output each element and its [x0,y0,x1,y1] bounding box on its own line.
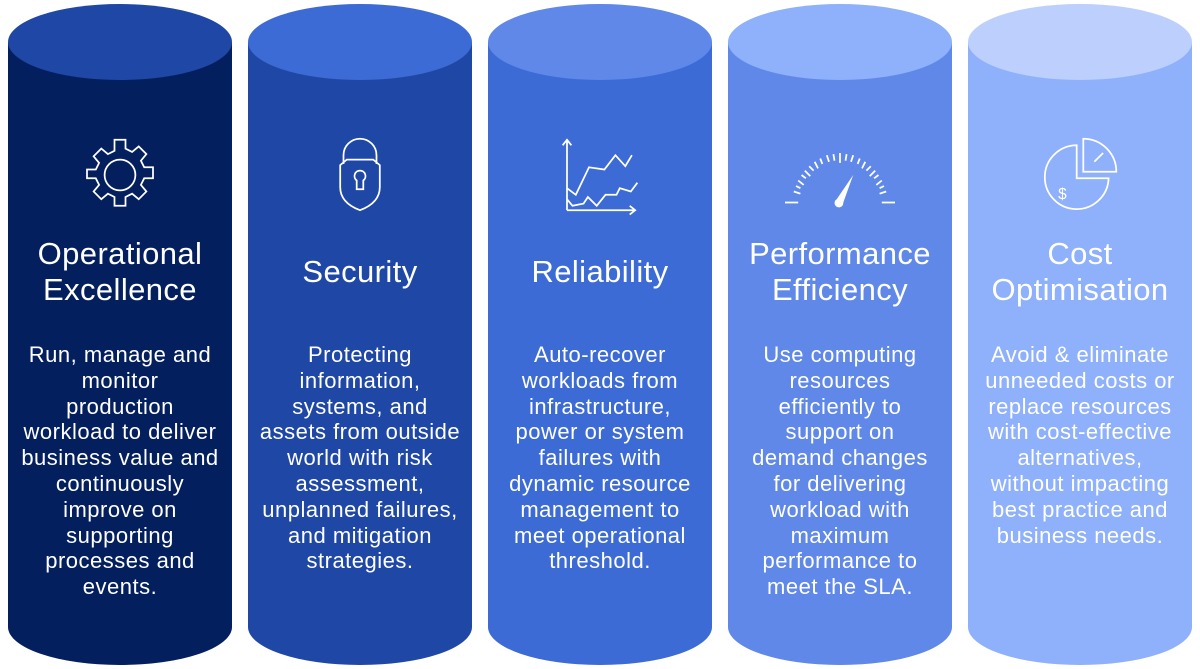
text block: without impacting [991,471,1169,496]
text block: workload with [770,497,910,522]
text block: workloads from [522,368,678,393]
text block: business needs. [997,523,1163,548]
text block [21,342,219,599]
text block: events. [83,574,157,599]
panel: performance efficiency [728,4,952,665]
text block: business value and [21,445,219,470]
text block: and mitigation [288,523,432,548]
text block [752,342,928,599]
text block [509,342,691,573]
text block: support on [786,419,894,444]
text block: meet operational [514,523,686,548]
text block: assets from outside [260,419,460,444]
text block: with cost-effective [988,419,1172,444]
text block: systems, and [292,394,428,419]
text block: Use computing [763,342,917,367]
text block [985,342,1175,548]
text block: Protecting [308,342,412,367]
text block: threshold. [549,548,651,573]
text block: production [66,394,174,419]
title: Efficiency [772,272,908,307]
text block: replace resources [988,394,1172,419]
icon: pie chart dollar: $ [1058,186,1067,203]
panel: security [248,4,472,665]
text block: for delivering [774,471,906,496]
title: Security [302,254,418,289]
text block: processes and [45,548,195,573]
text block: meet the SLA. [767,574,913,599]
text block: resources [789,368,891,393]
title [749,236,931,307]
panel: cost optimisation [968,4,1192,665]
panel: reliability [488,4,712,665]
text block: strategies. [306,548,414,573]
text block: failures with [539,445,661,470]
title [991,236,1169,307]
text block [260,342,460,573]
text block: infrastructure, [529,394,671,419]
panel: operational excellence [8,4,232,665]
title: Reliability [531,254,669,289]
text block: unneeded costs or [985,368,1175,393]
text block: information, [300,368,420,393]
text block: assessment, [296,471,424,496]
text block: efficiently to [779,394,901,419]
title [38,236,202,307]
title: Performance [749,236,931,271]
text block: management to [520,497,680,522]
text block: Auto-recover [534,342,666,367]
title: Operational [38,236,202,271]
text block: power or system [516,419,684,444]
title: Cost [1047,236,1113,271]
text block: improve on [63,497,177,522]
icon: line chart [562,138,638,216]
text block: maximum [791,523,889,548]
text block: performance to [763,548,917,573]
text block: alternatives, [1017,445,1143,470]
text block: unplanned failures, [262,497,458,522]
icon: pie chart dollar [1044,138,1118,210]
title: Excellence [43,272,197,307]
text block: demand changes [752,445,928,470]
text block: best practice and [992,497,1168,522]
text block: supporting [66,523,174,548]
text block: workload to deliver [24,419,216,444]
text block: Avoid & eliminate [991,342,1169,367]
icon: lock shield [339,138,381,212]
text block: dynamic resource [509,471,691,496]
text block: continuously [56,471,184,496]
text block: monitor [82,368,158,393]
icon: gear [86,138,154,207]
text block: Run, manage and [29,342,211,367]
text block: world with risk [287,445,433,470]
icon: speedometer [785,153,895,208]
title: Optimisation [991,272,1169,307]
